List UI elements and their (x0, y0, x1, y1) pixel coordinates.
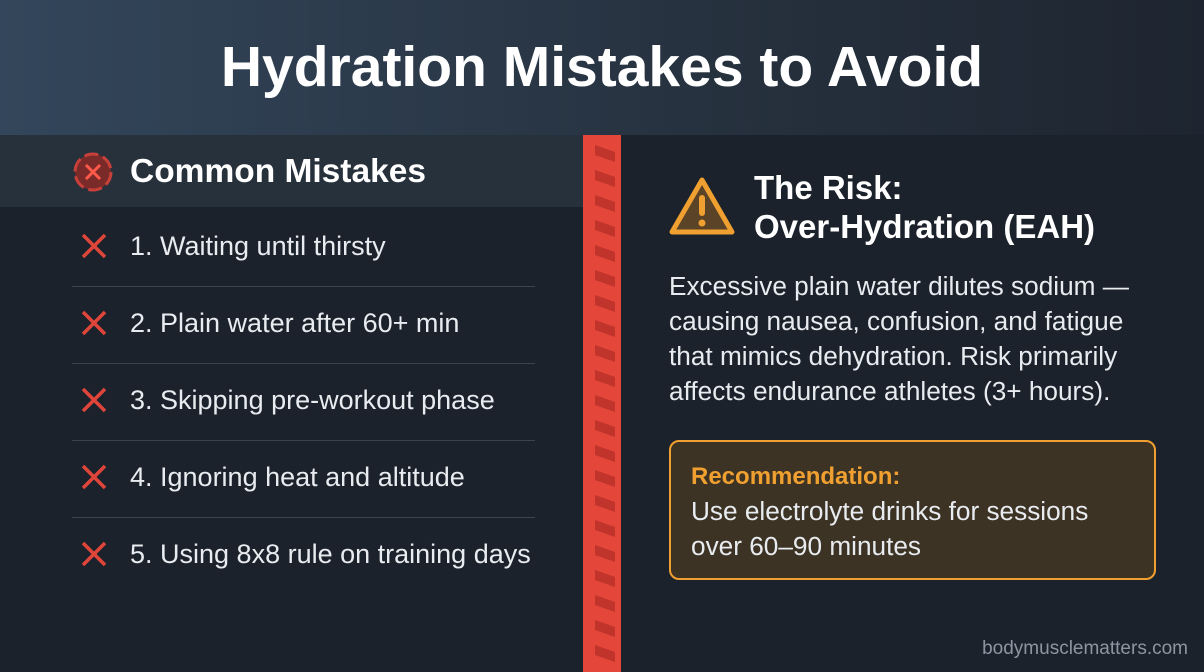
panel: risk (669, 169, 1156, 580)
mistake list (72, 231, 535, 569)
risk heading: The Risk: (754, 169, 903, 206)
callout: recommendation: Recommendation: (691, 463, 900, 490)
risk text: causing nausea, confusion, and fatigue (669, 306, 1123, 336)
heading: Common Mistakes (130, 153, 426, 190)
footer credit: bodymusclematters.com (982, 638, 1188, 659)
icon: warning (670, 178, 734, 234)
risk text: that mimics dehydration. Risk primarily (669, 341, 1117, 371)
callout: recommendation: Use electrolyte drinks for sessions (691, 496, 1088, 526)
mistake list: 1. Waiting until thirsty (130, 231, 386, 261)
divider: red hazard stripe (583, 135, 621, 672)
risk text: Excessive plain water dilutes sodium — (669, 271, 1129, 301)
mistake list: 3. Skipping pre-workout phase (130, 385, 495, 415)
callout: recommendation (669, 440, 1156, 580)
panel header (0, 135, 583, 207)
mistake list: 4. Ignoring heat and altitude (130, 462, 465, 492)
risk heading (754, 169, 1095, 245)
risk heading: Over-Hydration (EAH) (754, 208, 1095, 245)
risk text: affects endurance athletes (3+ hours). (669, 376, 1110, 406)
title: Hydration Mistakes to Avoid (221, 35, 983, 99)
icon: red x circle (74, 152, 112, 192)
mistake list: 5. Using 8x8 rule on training days (130, 539, 531, 569)
title band (0, 0, 1204, 135)
mistake list: 2. Plain water after 60+ min (130, 308, 459, 338)
callout: recommendation: over 60–90 minutes (691, 531, 921, 561)
risk text (669, 271, 1129, 406)
panel: common mistakes (0, 135, 583, 569)
